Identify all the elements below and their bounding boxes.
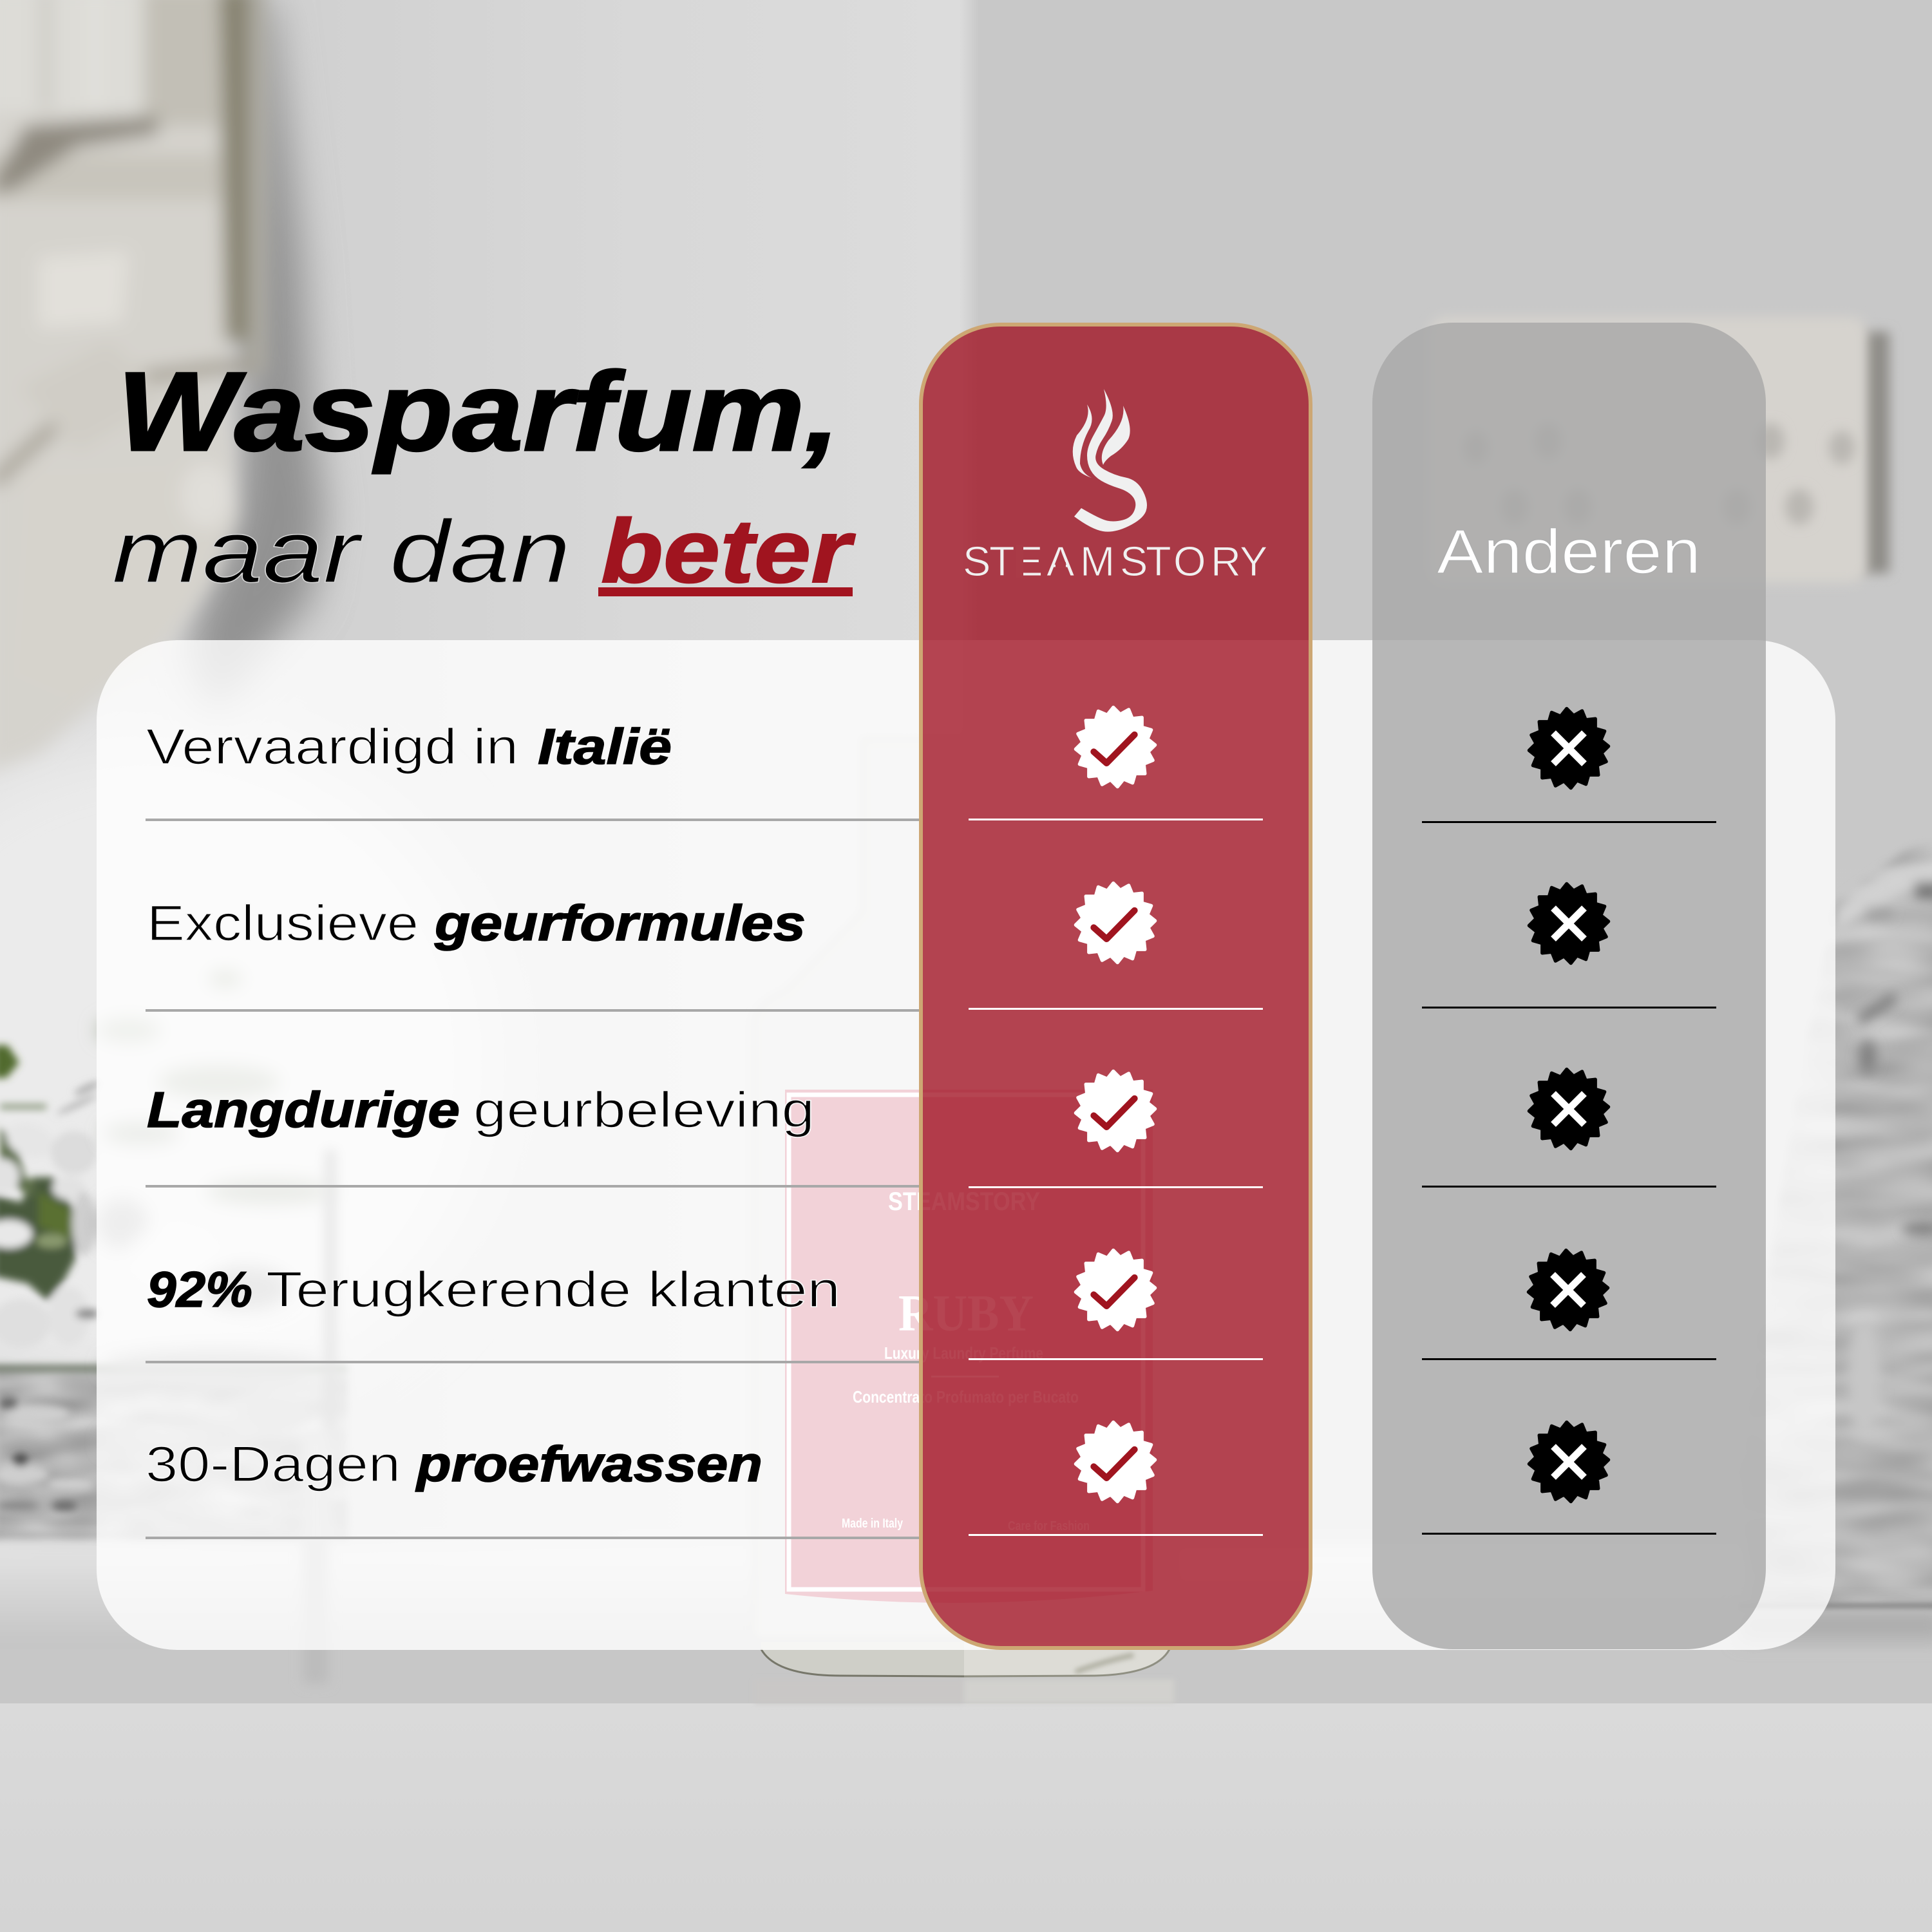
cross badge row 5: [1527, 1420, 1611, 1504]
bottle glass body: [754, 739, 1174, 1639]
icon: Steamstory steam logo: [1073, 389, 1147, 532]
title: Wasparfum,: [117, 348, 840, 474]
row 5 text: [146, 1435, 762, 1492]
check badge row 3: [1074, 1069, 1157, 1153]
column heading: Anderen: [1437, 516, 1701, 587]
row 3 text: geurbeleving: [473, 1081, 815, 1138]
title: beter: [601, 500, 855, 601]
check badge row 1: [1074, 705, 1157, 789]
row 5 text: 30-Dagen: [146, 1435, 401, 1492]
check badge row 4: [1074, 1248, 1157, 1332]
row 2 text: geurformules: [434, 895, 806, 951]
row 3 text: Langdurige: [147, 1081, 460, 1138]
cross badge row 4: [1526, 1248, 1610, 1332]
lower-left stones and plant: [0, 971, 348, 1684]
bottle label seen through panel: Concentrato Profumato per Bucato: [853, 1387, 1079, 1406]
cross badge row 1: [1527, 706, 1611, 790]
row 1 text: [146, 718, 672, 775]
row 4 text: Terugkerende klanten: [266, 1261, 840, 1318]
bottle label seen through panel: Care for Fashion: [1008, 1519, 1090, 1533]
row 3 text: [147, 1081, 815, 1138]
row 5 text: proefwassen: [415, 1435, 762, 1492]
bottle label seen through panel: RUBY: [898, 1285, 1034, 1342]
cross badge row 3: [1527, 1067, 1611, 1151]
socket on wall: [1430, 317, 1889, 583]
feature list: [146, 718, 920, 1539]
title: [112, 348, 855, 601]
bottle label seen through panel: STEAMSTORY: [888, 1188, 1040, 1216]
panel: feature list background: [97, 640, 1835, 1650]
brand name: STEAMSTORY: [963, 538, 1267, 585]
row 1 text: Vervaardigd in: [146, 718, 518, 775]
cross badge row 2: [1527, 882, 1611, 965]
row 4 text: 92%: [147, 1261, 252, 1318]
panel: Steamstory column: [921, 325, 1311, 1648]
row 2 text: Exclusieve: [147, 895, 419, 951]
bottle reflection and base: [755, 1642, 1174, 1703]
row 2 text: [147, 895, 806, 951]
row 4 text: [147, 1261, 840, 1318]
check badge row 5: [1074, 1420, 1157, 1504]
panel: Anderen column: [1372, 323, 1766, 1649]
title: maar dan: [112, 502, 571, 601]
towel right: [1739, 837, 1932, 1641]
bottle label seen through panel: [785, 1090, 1153, 1603]
bottle label seen through panel: Made in Italy: [842, 1517, 904, 1531]
check badge row 2: [1074, 881, 1157, 965]
bottle label seen through panel: Luxury Laundry Perfume: [884, 1343, 1043, 1363]
row 1 text: Italië: [538, 718, 672, 775]
